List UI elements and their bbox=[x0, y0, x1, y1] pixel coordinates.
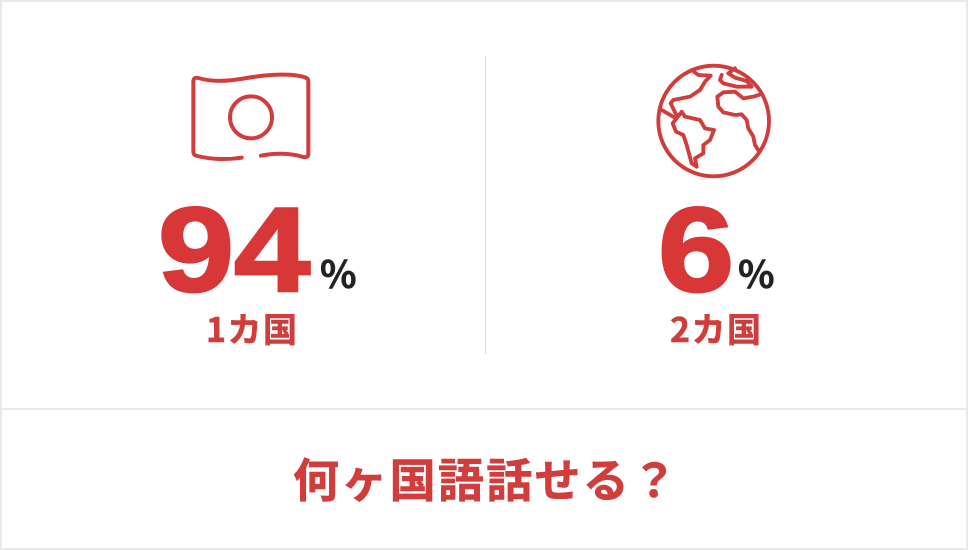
stat: 6 percent: 6 bbox=[658, 183, 734, 317]
percent sign: % bbox=[738, 244, 775, 299]
icon: globe bbox=[656, 64, 771, 178]
percent sign: % bbox=[320, 244, 357, 299]
icon: japanese flag bbox=[191, 72, 310, 161]
label: 2 countries: 2カ国 bbox=[670, 303, 763, 352]
label: 1 country: 1カ国 bbox=[206, 303, 299, 352]
question heading: 何ヶ国語話せる？ bbox=[293, 445, 679, 511]
stat: 94 percent: 94 bbox=[158, 183, 310, 317]
